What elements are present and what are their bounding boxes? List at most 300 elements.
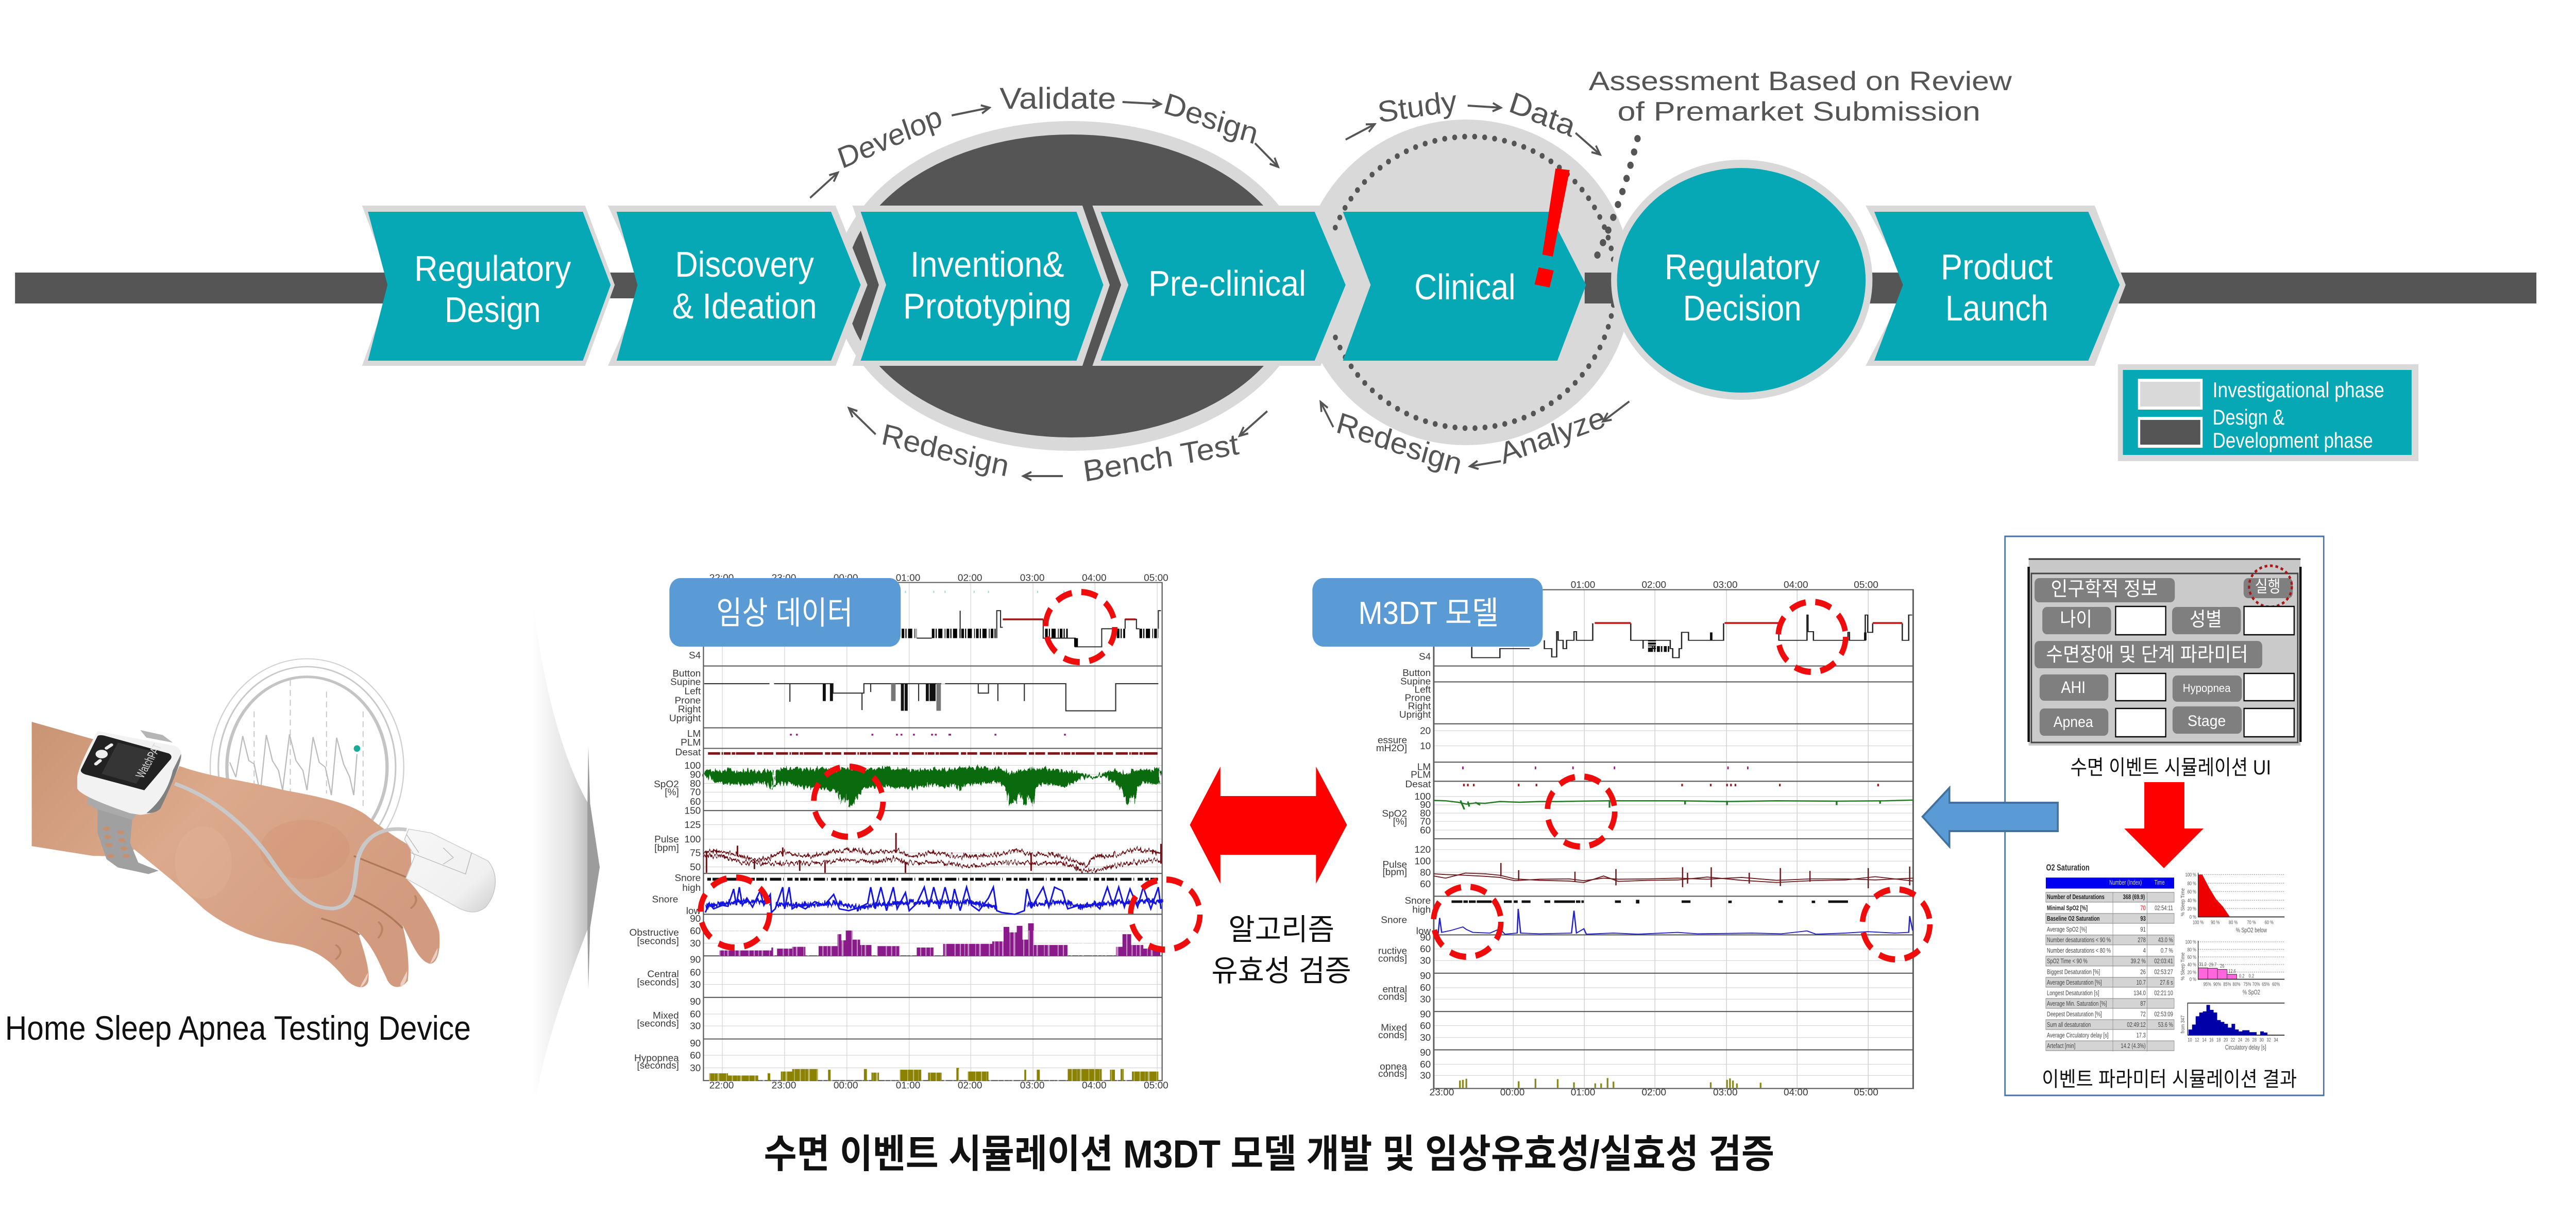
bottom time labels: 22:00 xyxy=(709,1080,734,1091)
text: algorithm validation: 알고리즘 xyxy=(1228,912,1334,946)
ellipse: Regulatory Decision xyxy=(1611,160,1872,400)
chart 2 axis labels xyxy=(1376,579,1878,1097)
channel labels: conds] xyxy=(1378,1029,1407,1040)
mini chart: SpO2 distribution: 100 % xyxy=(2185,939,2196,945)
channel labels: mH2O] xyxy=(1376,742,1407,753)
table rows: Deepest Desaturation [%] xyxy=(2047,1011,2102,1018)
mini chart: SpO2 below: 80 % xyxy=(2188,881,2196,886)
highlight circles: clinical data chart xyxy=(700,592,1200,950)
channel labels: 100 xyxy=(1414,856,1431,867)
channel labels: Snore xyxy=(652,894,678,904)
channel labels: 30 xyxy=(690,1062,701,1073)
table rows: Average Desaturation [%] xyxy=(2047,979,2102,986)
channel labels xyxy=(630,650,701,1073)
mini chart: circulatory delay: 12 xyxy=(2195,1037,2199,1043)
channel labels: 150 xyxy=(685,805,701,816)
dotted line to assessment note xyxy=(1594,139,1637,262)
cycle labels: development loop: Design xyxy=(1160,86,1262,150)
field: Apnea: Apnea xyxy=(2054,713,2093,730)
simulation UI xyxy=(2029,559,2300,746)
channel labels: Button xyxy=(1402,668,1431,678)
channel labels: 30 xyxy=(1420,1070,1431,1081)
table rows: Number of Desaturations xyxy=(2047,894,2105,901)
legend: Design & xyxy=(2213,405,2284,430)
arrow: red down xyxy=(2124,782,2204,868)
mini chart: circulatory delay: 34 xyxy=(2274,1037,2278,1043)
red exclamation mark xyxy=(1535,168,1570,288)
field: sex: 성별 xyxy=(2190,608,2222,630)
mini chart: circulatory delay: 32 xyxy=(2267,1037,2271,1043)
cycle labels: clinical loop: Analyze xyxy=(1496,400,1609,470)
channel labels: Desat xyxy=(1405,779,1431,789)
bottom time labels xyxy=(709,1080,1168,1091)
movement markers xyxy=(790,733,1066,736)
chevron: Discovery and Ideation xyxy=(608,206,868,366)
mini chart: SpO2 below: 80 % xyxy=(2229,919,2238,925)
channel labels: entral xyxy=(1382,984,1407,994)
assessment note xyxy=(1589,66,2012,127)
cycle labels: clinical loop: Study xyxy=(1376,84,1459,129)
channel labels: 100 xyxy=(1414,791,1431,802)
hypopnea bars xyxy=(709,1068,1158,1080)
chevron: Invention and Prototyping: Prototyping xyxy=(903,285,1072,326)
mini chart: circulatory delay: 26 xyxy=(2245,1037,2249,1043)
grid lines xyxy=(1434,590,1913,1089)
channel labels: SpO2 xyxy=(654,779,679,789)
sleep stage ticks xyxy=(905,591,1064,593)
channel labels: high xyxy=(682,882,701,893)
ellipse: Regulatory Decision: Regulatory xyxy=(1665,246,1820,287)
mini chart: SpO2 below: 0 % xyxy=(2190,914,2196,920)
label: clinical data xyxy=(669,578,901,647)
table rows: 39.2 % xyxy=(2131,958,2146,965)
table header: Time xyxy=(2155,880,2165,887)
bottom time labels: 03:00 xyxy=(1020,1080,1044,1091)
SpO2 trace xyxy=(1434,800,1913,809)
table rows: 14.2 (4.3%) xyxy=(2121,1043,2146,1050)
axis frame xyxy=(703,583,1162,1080)
table rows: 278 xyxy=(2138,937,2146,944)
channel labels: 125 xyxy=(685,819,701,830)
channel labels: [bpm] xyxy=(654,842,679,853)
movement markers xyxy=(1463,767,1748,769)
cycle labels: development loop: Bench Test xyxy=(1081,427,1241,488)
channel labels: Upright xyxy=(1399,709,1431,720)
table rows: Average Min. Saturation [%] xyxy=(2047,1001,2107,1007)
channel labels: 30 xyxy=(690,938,701,949)
mini chart: SpO2 distribution: 65% xyxy=(2262,982,2269,987)
chevron: Clinical: Clinical xyxy=(1414,266,1515,307)
ellipse: Regulatory Decision: Decision xyxy=(1683,288,1802,328)
mini chart: SpO2 distribution: 40 % xyxy=(2188,961,2196,968)
hypopnea bars xyxy=(1460,1078,1760,1088)
body position trace xyxy=(704,683,1158,711)
mini chart: circulatory delay: 16 xyxy=(2209,1037,2213,1043)
label: M3DT model xyxy=(1312,578,1543,647)
channel labels: 90 xyxy=(690,954,701,965)
channel labels: low xyxy=(1416,925,1431,936)
channel labels: 10 xyxy=(1420,740,1431,751)
field: sex xyxy=(2172,606,2294,635)
channel labels: 100 xyxy=(685,760,701,771)
chevron: Pre-clinical: Pre-clinical xyxy=(1148,263,1306,303)
channel labels: conds] xyxy=(1378,1069,1407,1079)
table rows: Average SpO2 [%] xyxy=(2047,926,2087,934)
table rows: Biggest Desaturation [%] xyxy=(2047,969,2100,976)
channel labels: conds] xyxy=(1378,991,1407,1002)
snore trace xyxy=(1434,909,1912,934)
channel labels: 60 xyxy=(1420,825,1431,835)
mini chart: SpO2 distribution: 60 % xyxy=(2188,954,2196,960)
bottom time labels: 23:00 xyxy=(772,1080,796,1091)
arrow: red double-headed comparison xyxy=(1190,767,1347,884)
channel labels: [%] xyxy=(1393,816,1407,826)
assessment note: Assessment Based on Review xyxy=(1589,66,2012,96)
channel labels: 30 xyxy=(1420,955,1431,966)
channel labels: 90 xyxy=(690,914,701,924)
table rows: 17.3 xyxy=(2137,1032,2146,1039)
O2 saturation results xyxy=(2046,863,2284,1052)
channel labels: 60 xyxy=(690,1009,701,1019)
table rows: 93 xyxy=(2140,916,2146,922)
mini chart: SpO2 distribution: 26 xyxy=(2220,963,2224,969)
table rows: 43.0 % xyxy=(2158,937,2173,944)
channel labels: 30 xyxy=(1420,994,1431,1005)
finger probe xyxy=(404,829,495,912)
channel labels: Right xyxy=(678,704,701,714)
design and development phase ellipse xyxy=(834,121,1309,451)
table rows: 02:54:11 xyxy=(2155,905,2173,912)
channel labels: 90 xyxy=(1420,1009,1431,1019)
cycle labels: clinical loop: Redesign xyxy=(1333,405,1466,481)
channel labels: Central xyxy=(647,969,679,979)
text: algorithm validation: 유효성 검증 xyxy=(1212,954,1351,988)
channel labels: 120 xyxy=(1414,844,1431,855)
table rows: 0.7 % xyxy=(2161,948,2173,955)
table rows: Sum all desaturation xyxy=(2047,1022,2091,1028)
channel labels: Desat xyxy=(675,747,701,757)
bottom time labels: 02:00 xyxy=(958,1080,982,1091)
watch body: WatchPAT xyxy=(133,742,165,780)
icon: home sleep apnea testing device on hand xyxy=(32,659,495,988)
chevron: Invention and Prototyping: Invention& xyxy=(910,244,1064,284)
waveform dial behind hand xyxy=(210,659,404,876)
table rows: 87 xyxy=(2140,1001,2146,1007)
channel labels: PLM xyxy=(681,737,701,748)
channel labels: LM xyxy=(687,728,701,739)
arrow: blue to model xyxy=(1923,788,2058,847)
chevron: Clinical xyxy=(1343,212,1586,361)
label: clinical data: 임상 데이터 xyxy=(716,596,853,631)
investigational phase ellipse xyxy=(1300,120,1632,445)
channel labels: 90 xyxy=(1420,932,1431,943)
label: M3DT model: M3DT 모델 xyxy=(1359,596,1499,631)
chart: clinical data polysomnography xyxy=(630,572,1168,1091)
field: AHI xyxy=(2040,673,2166,701)
channel labels xyxy=(1376,651,1431,1081)
mini chart: SpO2 below: 100 % xyxy=(2185,872,2196,877)
mini chart: SpO2 below: % Sleep Time xyxy=(2180,888,2186,916)
hypnogram trace xyxy=(902,611,1161,647)
time labels: bottom: 03:00 xyxy=(1713,1087,1738,1097)
mini chart: circulatory delay: 28 xyxy=(2252,1037,2257,1043)
channel labels: Right xyxy=(1408,701,1431,712)
channel labels: LM xyxy=(1417,762,1431,772)
mini chart: SpO2 below: 40 % xyxy=(2188,898,2196,903)
table rows: 02:03:41 xyxy=(2154,958,2173,965)
channel labels: ructive xyxy=(1378,945,1407,956)
mini chart: SpO2 distribution: 60% xyxy=(2272,982,2280,987)
time labels: top xyxy=(1571,579,1878,590)
mini chart: SpO2 distribution: 75% xyxy=(2243,982,2251,987)
mini chart: SpO2 below xyxy=(2180,872,2284,934)
table rows: Artefact [min] xyxy=(2047,1043,2075,1050)
mini chart: circulatory delay: from 347 xyxy=(2180,1016,2186,1033)
time labels: bottom: 23:00 xyxy=(1430,1087,1454,1097)
field: Apnea xyxy=(2040,708,2166,737)
mini chart: circulatory delay: 22 xyxy=(2231,1037,2235,1043)
top time labels: 01:00 xyxy=(896,572,920,583)
top time labels: 00:00 xyxy=(834,572,858,583)
channel labels: 30 xyxy=(690,1021,701,1031)
connector: clinical to regulatory decision xyxy=(1585,273,1621,303)
mini chart: circulatory delay: 30 xyxy=(2260,1037,2264,1043)
channel labels: 70 xyxy=(690,787,701,798)
process timeline bar: right xyxy=(2117,273,2536,303)
mini chart: SpO2 distribution: 80 % xyxy=(2188,946,2196,953)
channel labels: 60 xyxy=(1420,1020,1431,1031)
chevron: Discovery and Ideation: Discovery xyxy=(675,244,814,284)
mini chart: circulatory delay: 14 xyxy=(2202,1037,2207,1043)
caption: simulation UI: 수면 이벤트 시뮬레이션 UI xyxy=(2070,756,2271,779)
channel labels: [%] xyxy=(665,787,679,798)
hand xyxy=(32,722,439,988)
table rows xyxy=(2046,892,2174,1052)
snore markers xyxy=(1451,900,1584,903)
wrist strap xyxy=(88,730,173,874)
time labels: bottom xyxy=(1430,1087,1878,1097)
panel: simulation xyxy=(2005,536,2324,1095)
table rows: 10.7 xyxy=(2137,979,2146,986)
time labels: top: 03:00 xyxy=(1713,579,1738,590)
channel labels: 70 xyxy=(1420,816,1431,826)
table rows: 70 xyxy=(2140,905,2146,912)
channel labels: 80 xyxy=(1420,808,1431,818)
field: age xyxy=(2042,606,2166,635)
channel labels: low xyxy=(686,905,701,916)
mini chart: SpO2 distribution xyxy=(2180,939,2284,996)
mini chart: SpO2 distribution: % Sleep Time xyxy=(2180,953,2186,981)
time labels: bottom: 04:00 xyxy=(1784,1087,1808,1097)
cycle labels: clinical loop: Data xyxy=(1505,85,1580,143)
mini chart: SpO2 below: % SpO2 below xyxy=(2236,927,2267,934)
button: run: 실행 xyxy=(2255,578,2280,596)
channel labels: 100 xyxy=(685,834,701,844)
channel labels: [seconds] xyxy=(637,1060,679,1071)
run highlight xyxy=(2249,566,2292,607)
mini chart: SpO2 distribution: 29.7 xyxy=(2209,961,2216,968)
chevron: Discovery and Ideation: & Ideation xyxy=(672,285,817,326)
chevron: Regulatory Design: Design xyxy=(445,289,541,330)
channel labels: opnea xyxy=(1380,1061,1408,1072)
channel labels: 20 xyxy=(1420,725,1431,736)
legend xyxy=(2118,364,2418,461)
channel labels: Obstructive xyxy=(630,927,679,938)
cycle labels: development loop xyxy=(833,81,1262,488)
channel labels: 90 xyxy=(690,1038,701,1049)
field: Stage xyxy=(2173,706,2294,737)
channel labels: 90 xyxy=(690,769,701,780)
time labels: bottom: 00:00 xyxy=(1500,1087,1524,1097)
channel labels: [seconds] xyxy=(637,936,679,946)
bottom time labels: 01:00 xyxy=(896,1080,920,1091)
mini chart: SpO2 distribution: 80% xyxy=(2233,982,2241,987)
mini chart: SpO2 below: 100 % xyxy=(2193,919,2204,925)
mini chart: SpO2 distribution: 31.2 xyxy=(2199,961,2207,967)
process timeline bar: left xyxy=(15,273,393,303)
time labels: bottom: 02:00 xyxy=(1641,1087,1666,1097)
table rows: 02:49:12 xyxy=(2127,1022,2146,1028)
channel labels: Upright xyxy=(669,713,701,723)
cycle labels: development loop: Develop xyxy=(833,99,946,175)
table rows: 4 xyxy=(2143,948,2146,955)
mini chart: SpO2 distribution: 85% xyxy=(2223,982,2231,987)
snore markers xyxy=(707,877,1158,881)
caption: simulation results: 이벤트 파라미터 시뮬레이션 결과 xyxy=(2042,1068,2297,1090)
highlight circles: M3DT chart xyxy=(1433,602,1930,959)
mini chart: SpO2 distribution: % SpO2 xyxy=(2243,989,2260,996)
time labels: top: 01:00 xyxy=(1571,579,1595,590)
channel labels: essure xyxy=(1378,735,1407,746)
mini chart: SpO2 distribution: 0 % xyxy=(2190,976,2196,982)
channel labels: high xyxy=(1412,904,1431,915)
channel labels: S4 xyxy=(689,650,701,661)
table rows: 26 xyxy=(2140,969,2146,976)
snore trace xyxy=(705,887,1161,914)
table rows: 53.6 % xyxy=(2158,1022,2173,1028)
cycle labels: development loop: Validate xyxy=(999,81,1116,115)
channel labels: conds] xyxy=(1378,953,1407,964)
bottom time labels: 04:00 xyxy=(1082,1080,1107,1091)
channel labels: Left xyxy=(685,686,701,696)
channel labels: 90 xyxy=(1420,1047,1431,1058)
funnel shape pointing to charts xyxy=(528,567,600,1095)
top time labels xyxy=(709,572,1168,583)
bottom time labels: 00:00 xyxy=(834,1080,858,1091)
channel labels: 60 xyxy=(690,1050,701,1060)
channel labels: Mixed xyxy=(1381,1022,1407,1033)
bottom time labels: 05:00 xyxy=(1144,1080,1168,1091)
hypnogram trace xyxy=(1472,615,1912,657)
channel labels: 60 xyxy=(1420,983,1431,993)
sensor cable xyxy=(175,784,406,908)
connector: decision to launch xyxy=(1867,273,1908,303)
chart: M3DT model polysomnography xyxy=(1434,590,1913,1089)
channel labels: Hypopnea xyxy=(634,1053,679,1063)
obstructive apnea bars xyxy=(719,923,1160,956)
desaturation markers xyxy=(1464,784,1878,786)
button: demographics xyxy=(2035,578,2175,602)
top time labels: 22:00 xyxy=(709,572,734,583)
channel labels: 50 xyxy=(690,861,701,872)
channel labels: [seconds] xyxy=(637,977,679,988)
mini chart: circulatory delay: 20 xyxy=(2224,1037,2228,1043)
channel labels: Pulse xyxy=(654,834,679,844)
table rows: Longest Desaturation [s] xyxy=(2047,990,2099,997)
mini chart: SpO2 distribution: 90% xyxy=(2213,982,2221,987)
axis frame xyxy=(1434,590,1913,1089)
top time labels: 04:00 xyxy=(1082,572,1107,583)
table header xyxy=(2046,877,2174,889)
field: Hypopnea xyxy=(2173,673,2294,702)
channel labels: Button xyxy=(672,668,701,679)
time labels: top: 02:00 xyxy=(1641,579,1666,590)
channel labels: Pulse xyxy=(1382,859,1407,870)
time labels: bottom: 05:00 xyxy=(1854,1087,1878,1097)
cycle arrows: development loop xyxy=(810,102,1278,476)
channel labels: 75 xyxy=(690,848,701,858)
assessment note: of Premarket Submission xyxy=(1617,97,1980,127)
channel labels: Snore xyxy=(1381,915,1407,925)
field: AHI: AHI xyxy=(2061,679,2086,697)
table rows: 368 (69.9) xyxy=(2123,894,2145,901)
chevron: Product Launch: Launch xyxy=(1945,288,2048,328)
button: demographics: 인구학적 정보 xyxy=(2050,578,2158,600)
table rows: 02:53:27 xyxy=(2154,969,2173,976)
legend: Investigational phase xyxy=(2213,378,2384,402)
channel labels: Snore xyxy=(1404,895,1431,906)
table rows: SpO2 Time < 90 % xyxy=(2047,958,2088,965)
channel labels: 90 xyxy=(1420,970,1431,981)
mini chart: SpO2 below: 70 % xyxy=(2247,919,2256,925)
channel labels: 60 xyxy=(1420,1059,1431,1070)
table rows: 27.6 s xyxy=(2160,979,2173,986)
channel labels: Left xyxy=(1414,684,1431,695)
channel labels: 80 xyxy=(690,778,701,789)
desaturation markers xyxy=(708,752,1158,755)
mini chart: SpO2 below: 60 % xyxy=(2188,889,2196,894)
channel labels: 30 xyxy=(1420,1032,1431,1043)
text: algorithm validation xyxy=(1212,912,1351,988)
channel labels: SpO2 xyxy=(1382,808,1407,819)
button: parameters xyxy=(2035,641,2262,668)
channel labels: PLM xyxy=(1411,769,1431,780)
field: Hypopnea: Hypopnea xyxy=(2183,682,2231,695)
button: parameters: 수면장애 및 단계 파라미터 xyxy=(2046,644,2248,665)
time labels: top: 05:00 xyxy=(1854,579,1878,590)
table rows: Number desaturations < 80 % xyxy=(2047,948,2111,955)
table rows: Baseline O2 Saturation xyxy=(2047,916,2100,922)
pulse trace xyxy=(1434,863,1913,888)
time labels: bottom: 01:00 xyxy=(1571,1087,1595,1097)
channel labels: Supine xyxy=(1400,676,1431,686)
table header: Number (Index) xyxy=(2109,880,2142,887)
channel labels: 80 xyxy=(1420,867,1431,877)
mini chart: circulatory delay: Circulatory delay [s] xyxy=(2225,1044,2266,1051)
table rows: 91 xyxy=(2140,926,2146,934)
table rows: 02:21:10 xyxy=(2154,990,2173,997)
table rows: 72 xyxy=(2140,1011,2146,1018)
cycle labels: development loop: Redesign xyxy=(879,417,1012,483)
table rows: Average Circulatory delay [s] xyxy=(2047,1032,2109,1039)
channel labels: 60 xyxy=(1420,944,1431,954)
field: Stage: Stage xyxy=(2188,712,2226,729)
caption: device: Home Sleep Apnea Testing Device xyxy=(5,1010,471,1047)
mini chart: SpO2 distribution: 95% xyxy=(2204,982,2211,987)
top time labels: 05:00 xyxy=(1144,572,1168,583)
mini chart: SpO2 distribution: 0.2 xyxy=(2249,973,2254,979)
watch body xyxy=(77,731,182,815)
